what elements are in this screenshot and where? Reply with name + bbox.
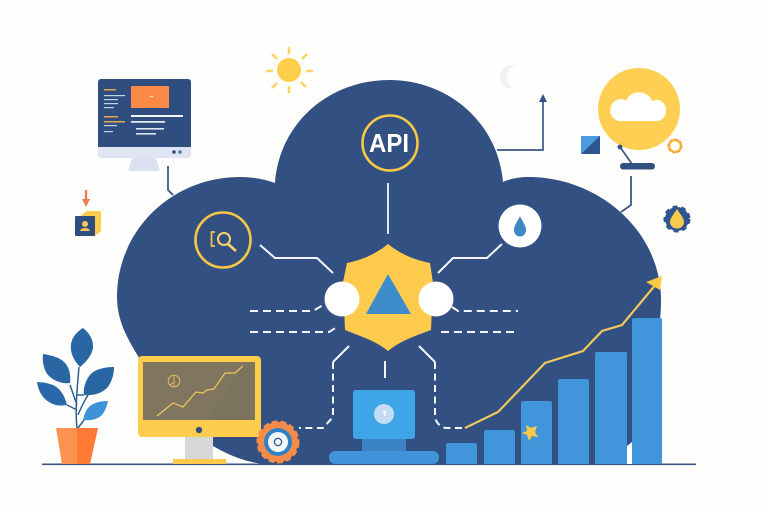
connector: API to hub <box>387 183 389 234</box>
trend line with arrow <box>465 276 662 428</box>
panel: code monitor <box>98 79 191 171</box>
white sliver between bars <box>627 442 632 464</box>
bar chart <box>446 318 662 464</box>
icon: stand <box>618 145 655 170</box>
central hub shield <box>324 244 454 351</box>
baseline <box>42 464 696 465</box>
API badge: API <box>369 128 409 158</box>
connectors around hub <box>250 244 518 428</box>
icon: yellow cloud circle <box>598 68 680 150</box>
icon: sun <box>266 47 313 93</box>
icon: user box with arrow <box>75 190 101 236</box>
icon: ghost cloud <box>500 56 564 90</box>
arrow: cloud to ghost cloud <box>497 94 547 150</box>
plant <box>37 328 114 464</box>
central cloud shape <box>117 80 661 464</box>
icon: water drop badge <box>498 204 542 248</box>
icon: split square <box>581 136 600 154</box>
connector: stand to cloud <box>621 176 631 212</box>
laptop <box>329 390 439 464</box>
connector: monitor to cloud <box>168 166 173 195</box>
icon: star <box>522 425 538 441</box>
API badge <box>362 116 418 170</box>
icon: orange gear <box>258 422 298 462</box>
icon: small orange gear <box>668 139 682 153</box>
icon: badge with drop <box>664 206 690 232</box>
panel: dashboard monitor <box>138 356 261 464</box>
icon: magnifier badge <box>196 212 250 268</box>
